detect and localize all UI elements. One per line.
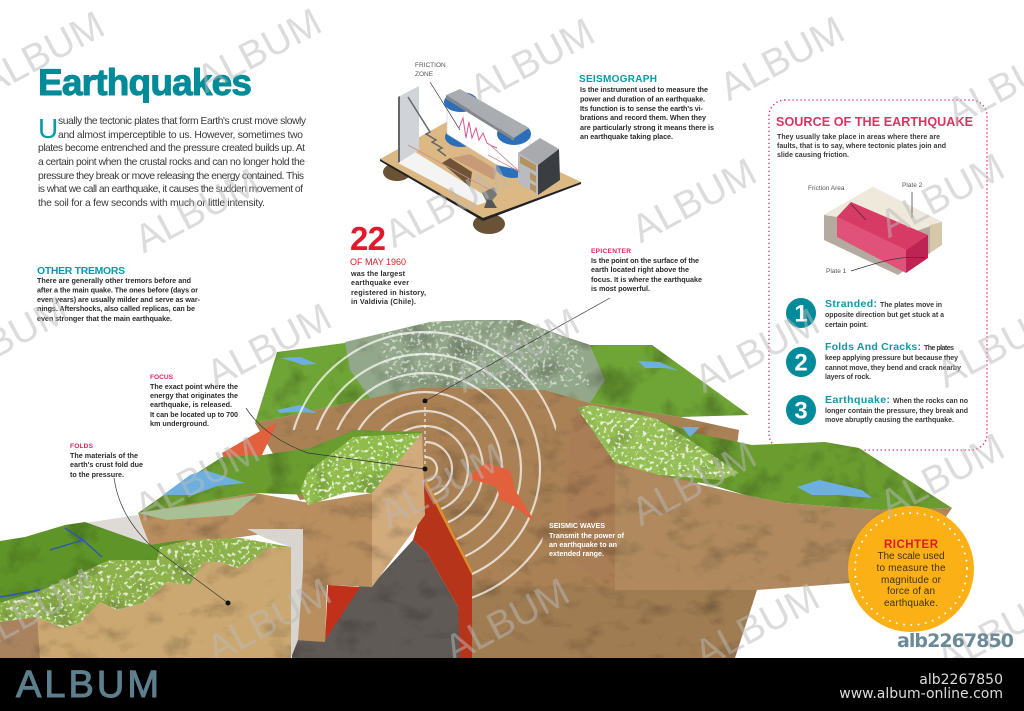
- seismograph text: an earthquake taking place.: [580, 132, 673, 141]
- watermarks: ALBUM: [688, 575, 827, 676]
- date callout: 22 of May 1960: [350, 220, 426, 306]
- seismograph text: brations and record them. When they: [580, 113, 706, 122]
- watermarks: ALBUM: [688, 300, 827, 401]
- seismograph illustration: [380, 62, 581, 234]
- date callout: 22 of May 1960: 22: [350, 220, 386, 257]
- watermarks: ALBUM: [873, 145, 1012, 246]
- focus text: energy that originates the: [150, 391, 238, 400]
- intro text block: is what we call an earthquake, it causes the sudden movement of: [38, 184, 303, 195]
- epicenter text: is most powerful.: [591, 284, 650, 293]
- folds text: [70, 443, 143, 479]
- step 2: folds and cracks: cannot move, they bend and crack nearby: [825, 365, 961, 372]
- watermarks: ALBUM: [200, 570, 339, 671]
- step 1: stranded: 1: [794, 300, 808, 328]
- footer bar: [0, 658, 1024, 711]
- intro text block: [38, 113, 307, 209]
- fault block diagram: Friction Area: [808, 185, 845, 192]
- step 1: stranded: Stranded:: [825, 298, 877, 310]
- other tremors text: after a the main quake. The ones before (days or: [37, 286, 198, 294]
- watermarks: ALBUM: [448, 300, 587, 401]
- right terrain block: [567, 405, 952, 590]
- seismic waves label: SEISMIC WAVES: [549, 521, 605, 530]
- focus text: km underground.: [150, 419, 209, 428]
- seismograph text: [579, 74, 714, 141]
- step 1: stranded: certain point.: [825, 322, 868, 329]
- other tremors text: [37, 266, 201, 323]
- epicenter text: focus. It is where the earthquake: [591, 275, 702, 284]
- step 2: folds and cracks: layers of rock.: [825, 374, 871, 381]
- panel: source of the earthquake: [769, 100, 987, 450]
- focus marker and line: [246, 408, 428, 472]
- panel heading: SOURCE OF THE EARTHQUAKE: [776, 115, 973, 129]
- seismic waves label: [549, 521, 625, 558]
- date callout: 22 of May 1960: OF MAY 1960: [350, 257, 406, 267]
- panel intro text: They usually take place in areas where there are: [777, 134, 940, 141]
- terrain cross-section illustration: [0, 298, 952, 658]
- watermarks: ALBUM: [713, 8, 852, 109]
- title: Earthquakes: [38, 62, 252, 103]
- intro text block: plates become entrenched and the pressure created builds up. At: [38, 143, 305, 154]
- panel intro text: [777, 134, 946, 159]
- focus text: The exact point where the: [150, 382, 238, 391]
- seismic waves label: an earthquake to an: [549, 540, 617, 549]
- epicenter text: earth located right above the: [591, 265, 689, 274]
- intro text block: pressure they break or move releasing the energy contained. This: [38, 171, 304, 182]
- fault block diagram: Plate 1: [826, 268, 847, 275]
- watermarks: ALBUM: [190, 0, 329, 101]
- date callout: 22 of May 1960: in Valdivia (Chile).: [351, 297, 416, 306]
- step 3: earthquake: move abruptly causing the earthquake.: [825, 417, 954, 424]
- watermarks: ALBUM: [378, 155, 517, 256]
- folds text: FOLDS: [70, 443, 94, 450]
- step 3: earthquake: [786, 394, 968, 425]
- step 3: earthquake: 3: [794, 398, 808, 424]
- fault block diagram: [808, 182, 942, 275]
- intro text block: and almost imperceptible to us. However, sometimes two: [58, 130, 303, 141]
- focus text: earthquake, is released.: [150, 400, 232, 409]
- other tremors text: even years) are usually milder and serve as war-: [37, 295, 201, 304]
- panel intro text: faults, that is to say, where tectonic plates join and: [777, 143, 946, 150]
- foreground folds block: [0, 515, 303, 658]
- folds marker and line: [114, 478, 230, 606]
- step 2: folds and cracks: Folds And Cracks:: [825, 341, 921, 353]
- richter callout: The scale used: [878, 551, 944, 562]
- other tremors text: nings. Aftershocks, also called replicas, can be: [37, 304, 195, 313]
- red fault wall: [413, 477, 472, 658]
- back terrain block: [255, 320, 749, 590]
- step 3: earthquake: Earthquake:: [825, 394, 890, 406]
- red arrow right: [468, 463, 535, 522]
- watermarks: ALBUM: [373, 435, 512, 536]
- seismograph text: Its function is to sense the earth's vi-: [580, 104, 704, 113]
- seismic wave rings: [288, 332, 562, 606]
- step 2: folds and cracks: The plates: [924, 345, 954, 352]
- footer logo: ALBUM: [16, 664, 159, 706]
- epicenter text: EPICENTER: [591, 248, 631, 255]
- watermarks: ALBUM: [463, 10, 602, 111]
- watermarks: ALBUM: [200, 295, 339, 396]
- red arrow left: [222, 423, 277, 468]
- friction zone label: ZONE: [415, 71, 434, 78]
- richter callout: to measure the: [876, 563, 946, 574]
- focus text: [150, 374, 238, 428]
- epicenter text: Is the point on the surface of the: [591, 256, 699, 265]
- step 3: earthquake: longer contain the pressure, they break and: [825, 408, 968, 415]
- richter callout: earthquake.: [884, 598, 938, 609]
- date callout: 22 of May 1960: was the largest: [350, 269, 406, 278]
- intro text block: a certain point when the crustal rocks and can no longer hold the: [38, 157, 305, 168]
- lower rock and grey floor: [292, 540, 757, 658]
- epicenter marker and line: [422, 298, 610, 469]
- richter callout: force of an: [887, 586, 935, 597]
- focus text: It can be located up to 700: [150, 410, 238, 419]
- intro text block: the soil for a few seconds with much or little intensity.: [38, 198, 265, 209]
- epicenter text: [591, 248, 702, 293]
- panel intro text: slide causing friction.: [777, 152, 849, 159]
- step 3: earthquake: When the rocks can no: [893, 398, 968, 405]
- richter callout: RICHTER: [884, 539, 939, 551]
- step 2: folds and cracks: keep applying pressure but because they: [825, 355, 958, 362]
- intro text block: sually the tectonic plates that form Earth's crust move slowly: [58, 116, 307, 127]
- focus text: FOCUS: [150, 374, 174, 381]
- watermarks: ALBUM: [873, 425, 1012, 526]
- seismograph text: Is the instrument used to measure the: [580, 85, 708, 94]
- seismic waves label: extended range.: [549, 549, 604, 558]
- watermarks: ALBUM: [625, 150, 764, 251]
- folds text: to the pressure.: [70, 470, 124, 479]
- footer credits: [839, 672, 1003, 702]
- watermarks: ALBUM: [128, 428, 267, 529]
- step 1: stranded: [786, 298, 944, 329]
- other tremors text: even stronger that the main earthquake.: [37, 314, 172, 323]
- seismic waves label: Transmit the power of: [549, 531, 625, 540]
- watermarks: ALBUM: [625, 433, 764, 534]
- date callout: 22 of May 1960: earthquake ever: [351, 278, 409, 287]
- seismograph text: are particularly strong it means there is: [580, 123, 714, 132]
- date callout: 22 of May 1960: registered in history,: [351, 288, 426, 297]
- watermarks: ALBUM: [438, 570, 577, 671]
- friction zone label: FRICTION: [415, 62, 446, 69]
- footer credits: alb2267850: [919, 672, 1003, 688]
- step 1: stranded: The plates move in: [880, 302, 942, 309]
- folds text: The materials of the: [70, 451, 138, 460]
- step 2: folds and cracks: 2: [794, 350, 808, 376]
- other tremors text: There are generally other tremors before and: [37, 276, 191, 285]
- image id overlay: alb2267850: [897, 630, 1014, 652]
- seismograph text: SEISMOGRAPH: [579, 74, 657, 85]
- intro text block: U: [38, 113, 58, 144]
- step 1: stranded: opposite direction but get stuck at a: [825, 312, 944, 319]
- friction zone label: [415, 62, 460, 130]
- richter callout: magnitude or: [881, 575, 942, 586]
- left central block: [138, 430, 425, 642]
- step 2: folds and cracks: [786, 341, 961, 381]
- fault block diagram: Plate 2: [902, 182, 923, 189]
- watermarks: ALBUM: [128, 160, 267, 261]
- richter callout: [848, 506, 974, 632]
- seismograph text: power and duration of an earthquake.: [580, 94, 705, 104]
- other tremors text: OTHER TREMORS: [37, 266, 125, 277]
- footer credits: www.album-online.com: [839, 686, 1003, 702]
- folds text: earth's crust fold due: [70, 460, 143, 469]
